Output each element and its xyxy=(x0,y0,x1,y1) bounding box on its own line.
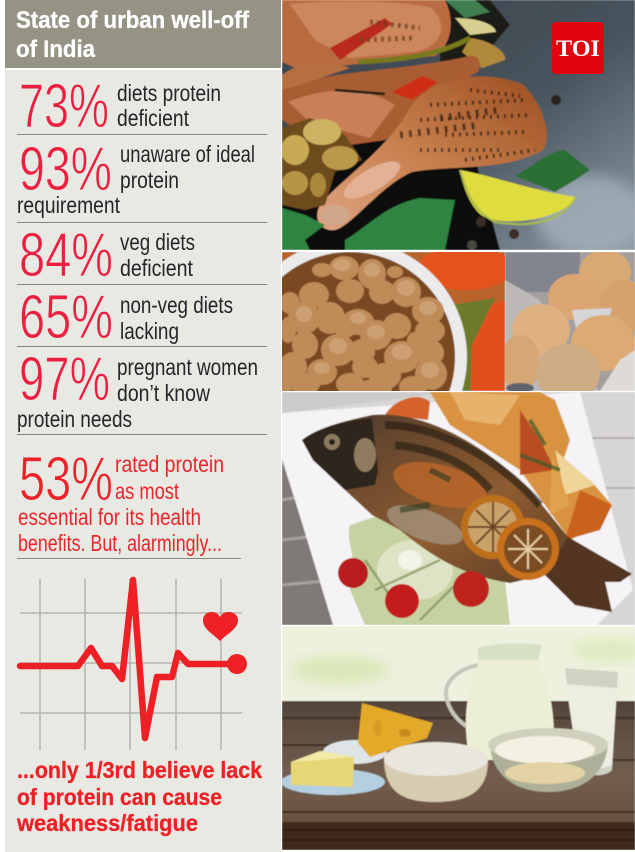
photo: grilled fish on plate xyxy=(282,392,635,625)
stat: 53% rated protein as most essential: rated protein xyxy=(115,451,224,477)
stat: 65% non-veg diets lacking: 65% xyxy=(19,283,113,352)
logo: TOI xyxy=(552,22,604,74)
stat: 84% veg diets deficient: deficient xyxy=(120,255,194,281)
photo: soya chunks in bowl xyxy=(282,252,505,391)
stat: 65% non-veg diets lacking xyxy=(17,283,267,352)
callout: only 1/3rd believe lack of protein: of protein can cause xyxy=(17,784,222,810)
stat: 84% veg diets deficient: 84% xyxy=(19,221,113,290)
stat: 93% unaware of ideal protein requirement: unaware of ideal xyxy=(120,141,255,167)
stat: 53% rated protein as most essential xyxy=(17,445,241,559)
stat: 84% veg diets deficient xyxy=(17,221,267,290)
logo: TOI: TOI xyxy=(556,36,600,61)
stat: 97% pregnant women don't know protein needs: protein needs xyxy=(17,406,132,432)
stat: 53% rated protein as most essential: essential for its health xyxy=(18,504,201,530)
stat: 53% rated protein as most essential: benefits. But, alarmingly... xyxy=(18,530,222,556)
photo: roast chicken xyxy=(281,0,635,255)
stat: 97% pregnant women don't know protein needs: 97% xyxy=(19,345,110,414)
photo: dairy products on table xyxy=(281,626,635,850)
stat: 97% pregnant women don't know protein needs xyxy=(17,345,267,435)
stat: 73% diets protein deficient: 73% xyxy=(19,72,109,141)
stat: 73% diets protein deficient: diets protein xyxy=(117,80,221,106)
panel: left column background xyxy=(5,0,281,852)
stat: 53% rated protein as most essential: 53% xyxy=(19,445,113,514)
stat: 53% rated protein as most essential: as most xyxy=(115,478,179,504)
callout: only 1/3rd believe lack of protein: weakness/fatigue xyxy=(16,810,198,836)
stat: 84% veg diets deficient: veg diets xyxy=(120,229,195,255)
heading: state of urban well-off of India: State of urban well-off xyxy=(16,7,250,34)
stat: 65% non-veg diets lacking: non-veg diets xyxy=(120,292,233,318)
stat: 93% unaware of ideal protein requirement: protein xyxy=(120,167,179,193)
stat: 93% unaware of ideal protein requirement: requirement xyxy=(17,192,121,218)
stat: 97% pregnant women don't know protein needs: don’t know xyxy=(117,380,210,406)
chart: heartbeat line on grid with heart xyxy=(20,579,247,750)
stat: 73% diets protein deficient: deficient xyxy=(117,105,190,131)
stat: 93% unaware of ideal protein requirement xyxy=(17,135,267,223)
stat: 73% diets protein deficient xyxy=(17,72,267,141)
photo: eggs in carton xyxy=(505,252,635,391)
heading: state of urban well-off of India xyxy=(5,0,281,70)
stat: 65% non-veg diets lacking: lacking xyxy=(120,318,179,344)
stat: 93% unaware of ideal protein requirement: 93% xyxy=(19,135,112,204)
callout: only 1/3rd believe lack of protein: ...only 1/3rd believe lack xyxy=(17,757,262,783)
heading: state of urban well-off of India: of India xyxy=(16,36,96,63)
callout: only 1/3rd believe lack of protein xyxy=(16,757,262,836)
stat: 97% pregnant women don't know protein needs: pregnant women xyxy=(117,354,258,380)
